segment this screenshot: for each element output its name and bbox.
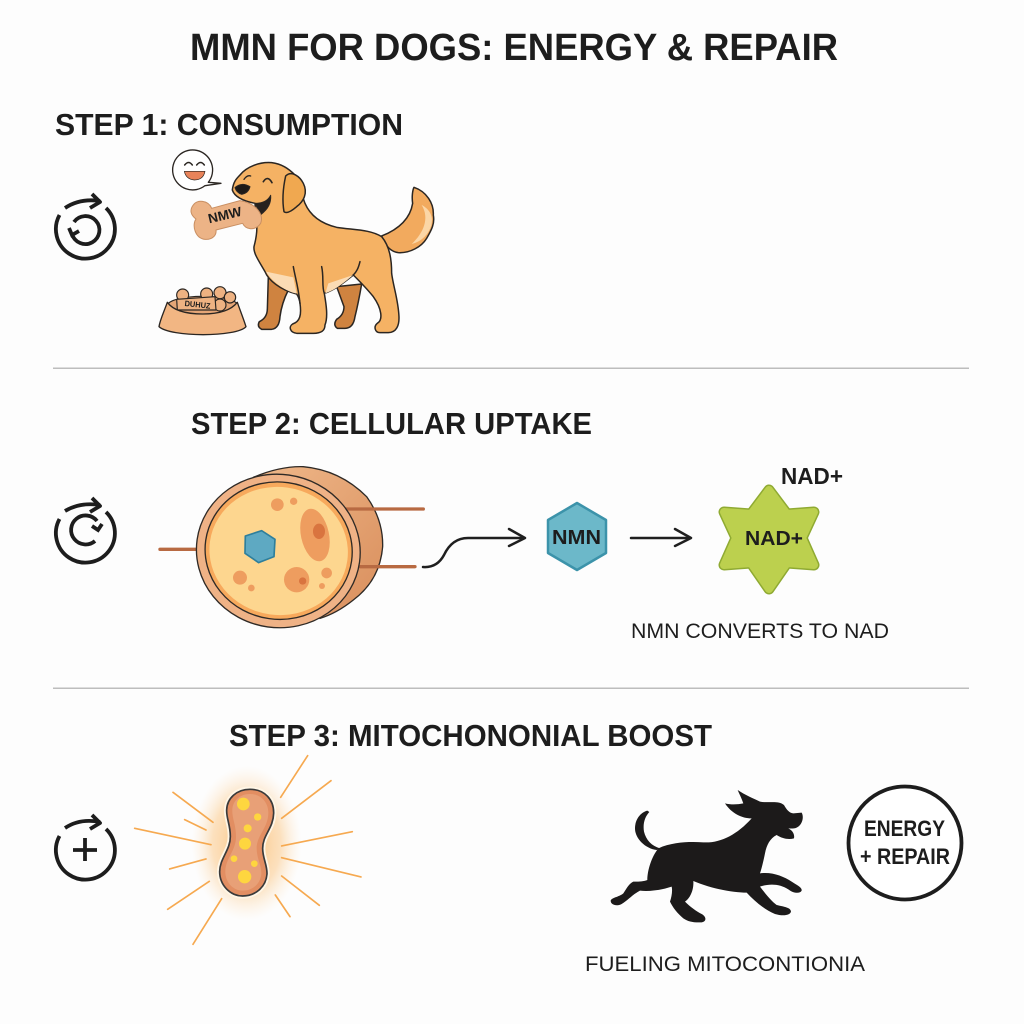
icon: speech bubble (173, 150, 221, 190)
illustration: mitochondrion (135, 756, 361, 944)
icon: step 2 cycle (56, 498, 115, 563)
eye (263, 179, 272, 183)
icon: hexagon inside cell (245, 531, 275, 563)
leg lines (293, 262, 360, 303)
tail (382, 187, 434, 253)
cytoplasm (201, 478, 356, 624)
icon: bone: NMW (207, 204, 244, 226)
ear (283, 174, 305, 212)
outer membrane (186, 464, 370, 638)
far legs (258, 277, 362, 329)
icon: bone (191, 201, 261, 239)
matrix granules (231, 798, 261, 883)
body (232, 163, 399, 333)
arrow: cell to NMN (423, 529, 525, 567)
cell cylinder side (253, 467, 383, 618)
icon: running dog silhouette (611, 790, 803, 922)
badge: energy + repair: ENERGY (864, 816, 945, 841)
icon: step 3 cycle (56, 815, 115, 880)
heading: step 3: STEP 3: MITOCHONONIAL BOOST (229, 718, 712, 753)
badge: energy + repair: + REPAIR (860, 844, 950, 869)
illustration: dog with bone (159, 150, 434, 335)
illustration: cell (160, 464, 423, 638)
title: MMN FOR DOGS: ENERGY & REPAIR (190, 27, 838, 69)
organelles (233, 498, 334, 592)
protein channels (160, 544, 205, 554)
icon: NMN hexagon (548, 503, 606, 570)
icon: NAD star: NAD+ (745, 528, 803, 550)
energy rays (135, 756, 361, 944)
icon: food bowl: DUHUZ (184, 299, 211, 311)
icon: food bowl (159, 287, 246, 335)
icon: NMN hexagon: NMN (552, 527, 601, 549)
heading: step 1: STEP 1: CONSUMPTION (55, 107, 403, 142)
arrow: NMN to NAD (631, 529, 691, 546)
inner membrane (196, 472, 361, 629)
label: NAD+: NAD+ (781, 463, 843, 489)
heading: step 2: STEP 2: CELLULAR UPTAKE (191, 406, 592, 441)
icon: step 1 cycle (56, 194, 115, 259)
mouth (255, 195, 271, 215)
mitochondrion body (220, 789, 274, 896)
divider (53, 688, 969, 689)
divider (53, 368, 969, 369)
glow (192, 766, 302, 921)
caption: NMN converts: NMN CONVERTS TO NAD (631, 620, 889, 643)
icon: NAD star (724, 490, 814, 589)
belly (266, 272, 353, 294)
badge: energy + repair (848, 786, 962, 900)
nose (235, 184, 250, 194)
caption: fueling: FUELING MITOCONTIONIA (585, 953, 865, 976)
